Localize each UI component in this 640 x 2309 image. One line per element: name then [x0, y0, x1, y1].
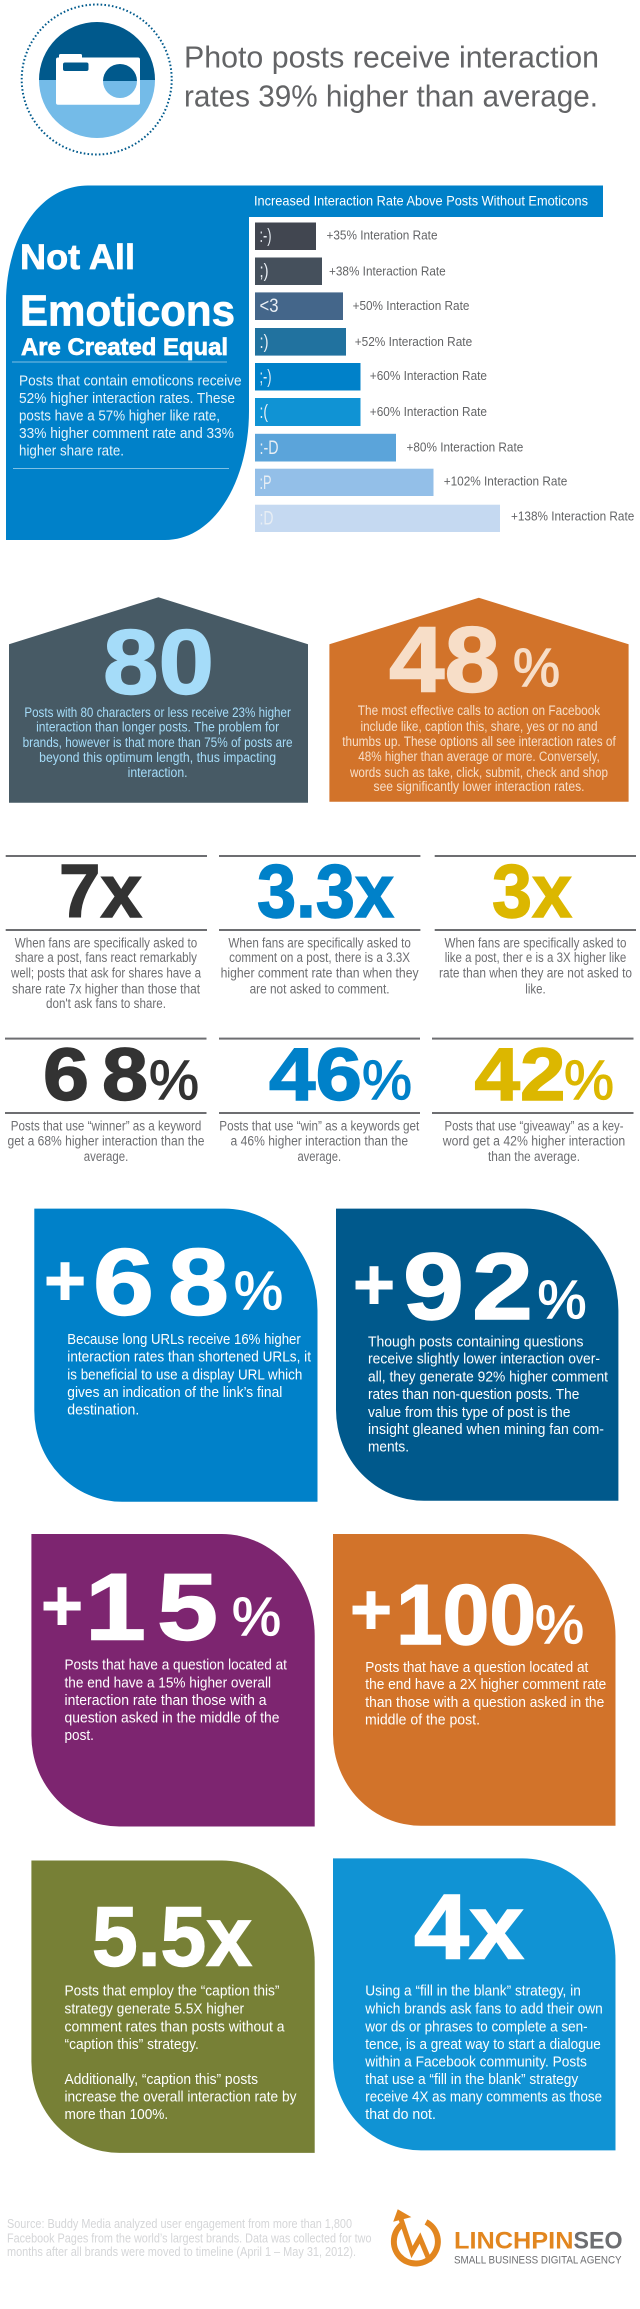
stat: +68%: + [44, 1241, 86, 1321]
title: Photo posts receive interaction [184, 39, 599, 74]
stat: +68% [44, 1229, 283, 1335]
bar chart: interaction rate by emoticon: :-) [260, 226, 272, 247]
stat: 3.3x comments [219, 849, 420, 996]
text: emoticons summary: Posts that contain emoticons receive [19, 372, 242, 390]
stat: 46% win: Posts that use “win” as a keywords get [219, 1118, 420, 1133]
title [184, 39, 599, 114]
bar chart: interaction rate by emoticon: :D [260, 508, 274, 530]
source note: Facebook Pages from the world’s largest brands. Data was collected for two [7, 2232, 372, 2246]
logo: Linchpin SEO: SEO [574, 2227, 622, 2254]
bar chart: interaction rate by emoticon: :-D [260, 438, 278, 459]
text: long URLs detail: gives an indication of the link’s final [67, 1384, 282, 1401]
stat: 68% winner: 8 [102, 1033, 148, 1116]
bar chart: interaction rate by emoticon: ;-) [260, 367, 272, 388]
panel: 48 percent [329, 598, 629, 802]
text: emoticons summary: posts have a 57% higher like rate, [19, 407, 220, 424]
stat: 68% winner: 6 [43, 1033, 89, 1116]
stat: +15% [41, 1554, 281, 1660]
text: questions detail: value from this type of post is the [368, 1404, 570, 1421]
stat: 68% winner: Posts that use “winner” as a keyword [11, 1118, 201, 1133]
stat: 42% giveaway: than the average. [488, 1149, 580, 1164]
stat: 42% giveaway [432, 1033, 634, 1164]
text: question at end detail: Posts that have a question located at [64, 1657, 288, 1674]
stat: 48%: 48 [389, 608, 500, 712]
stat: 3x likes [435, 849, 636, 996]
text: emoticons summary: 52% higher interaction rates. These [19, 390, 235, 407]
stat: +92%: % [538, 1270, 586, 1330]
text: 80 characters detail: interaction. [128, 765, 188, 780]
stat: +15%: 5 [157, 1554, 218, 1660]
text: long URLs detail [67, 1331, 312, 1419]
stat: 48%: % [513, 638, 560, 698]
text: fill in the blank detail: Using a “fill in the blank” strategy, in [365, 1983, 581, 2000]
stat: +15%: 1 [85, 1554, 146, 1660]
stat: +92%: + [353, 1245, 395, 1325]
stat: 7x shares: well; posts that ask for shares have a [10, 965, 201, 980]
tagline: SMALL BUSINESS DIGITAL AGENCY [454, 2254, 622, 2266]
title: rates 39% higher than average. [184, 78, 598, 114]
bar chart: interaction rate by emoticon: +80% Interaction Rate [406, 440, 523, 454]
stat: 7x shares: share a post, fans react remarkably [15, 950, 197, 965]
text: calls to action detail: The most effective calls to action on Facebook [358, 703, 600, 718]
source note: Source: Buddy Media analyzed user engagement from more than 1,800 [7, 2217, 352, 2231]
stat: 46% win: a 46% higher interaction than the [231, 1134, 408, 1148]
text: comment rate detail: middle of the post. [365, 1711, 480, 1728]
stat: +92%: 2 [472, 1234, 533, 1340]
text: questions detail: insight gleaned when mining fan com- [368, 1421, 604, 1438]
stat: 80: 80 [103, 612, 214, 714]
text: questions detail: all, they generate 92% higher comment [368, 1368, 609, 1385]
text: calls to action detail: include like, caption this, share, yes or no and [360, 719, 598, 734]
bar chart: interaction rate by emoticon: +38% Interaction Rate [329, 264, 446, 278]
text: question at end detail: post. [64, 1727, 94, 1744]
bar chart: interaction rate by emoticon: +138% Interaction Rate [511, 510, 634, 524]
stat: 68% winner: % [149, 1048, 199, 1111]
text: comment rate detail: Posts that have a question located at [365, 1659, 589, 1676]
text: fill in the blank detail: tence, is a great way to start a dialogue [365, 2036, 601, 2053]
panel: emoticons intro [6, 186, 603, 540]
stat: 7x shares [6, 849, 207, 1011]
stat: +68%: 6 [93, 1229, 154, 1335]
stat: 7x shares: don't ask fans to share. [46, 996, 166, 1011]
icon: logo ring and arrow [394, 2210, 438, 2264]
stat: +92% [353, 1234, 586, 1340]
stat: 3.3x comments: higher comment rate than when they [221, 965, 419, 980]
text: 80 characters detail: interaction than longer posts. The problem for [36, 720, 280, 735]
card: +15% question at end [31, 1534, 315, 1826]
text: long URLs detail: destination. [67, 1402, 139, 1419]
text: comment rate detail: than those with a question asked in the [365, 1694, 604, 1711]
text: fill in the blank detail: within a Facebook community. Posts [364, 2053, 587, 2070]
source note: months after all brands were moved to timeline (April 1 – May 31, 2012). [7, 2245, 356, 2259]
stat: +68%: 8 [168, 1229, 229, 1335]
stat: 46% win: 46 [269, 1033, 362, 1116]
text: 80 characters detail: beyond this optimum length, thus impacting [39, 750, 276, 765]
bar chart: interaction rate by emoticon: +60% Interaction Rate [370, 405, 487, 419]
text: fill in the blank detail: wor ds or phrases to complete a sen- [364, 2018, 588, 2035]
heading: are created equal: Are Created Equal [21, 334, 228, 361]
stat: 3x likes: like. [525, 981, 546, 996]
bar chart: interaction rate by emoticon: +50% Interaction Rate [353, 299, 469, 313]
stat: +92%: 9 [403, 1234, 464, 1340]
text: calls to action detail: 48% higher than average or more. Conversely, [358, 749, 600, 764]
bar chart: interaction rate by emoticon: :P [260, 473, 272, 494]
icon: camera badge [22, 4, 172, 154]
heading: not all: Not All [20, 238, 135, 277]
text: questions detail: receive slightly lower interaction over- [368, 1351, 600, 1368]
stat: 68% winner: average. [84, 1149, 128, 1164]
card: +92% questions [336, 1209, 618, 1501]
stat: 3.3x comments: 3.3x [257, 849, 394, 933]
text: caption this detail: more than 100%. [64, 2106, 168, 2123]
stat: 5.5x: 5.5x [92, 1890, 252, 1984]
card: +68% long URLs [34, 1209, 318, 1502]
text: question at end detail: question asked in the middle of the [64, 1710, 280, 1726]
bar chart: interaction rate by emoticon: :) [260, 332, 268, 353]
text: 80 characters detail: brands, however is that more than 75% of posts are [23, 735, 293, 750]
text: caption this detail: increase the overall interaction rate by [64, 2088, 297, 2105]
text: fill in the blank detail: receive 4X as many comments as those [365, 2088, 602, 2105]
text: emoticons summary: 33% higher comment rate and 33% [19, 425, 234, 442]
text: calls to action detail: see significantly lower interaction rates. [374, 779, 584, 794]
card: 4x fill in the blank [333, 1858, 616, 2150]
stat: 68% winner [5, 1033, 206, 1164]
logo: Linchpin SEO [394, 2210, 622, 2266]
bar chart: interaction rate by emoticon: +102% Interaction Rate [444, 474, 567, 488]
text: calls to action detail: words such as take, click, submit, check and shop [349, 765, 608, 780]
source note [7, 2217, 372, 2259]
text: 80 characters detail: Posts with 80 characters or less receive 23% higher [24, 705, 291, 720]
text: questions detail: Though posts containing questions [368, 1333, 584, 1350]
stat: 46% win: average. [297, 1149, 341, 1164]
text: fill in the blank detail: which brands ask fans to add their own [364, 2000, 603, 2018]
bar chart: interaction rate by emoticon: +52% Interaction Rate [355, 335, 472, 349]
bar chart: interaction rate by emoticon [255, 222, 634, 532]
text: question at end detail: the end have a 15% higher overall [64, 1674, 271, 1692]
stat: +100% [350, 1568, 584, 1663]
bar chart: interaction rate by emoticon: ;) [260, 261, 268, 282]
text: comment rate detail: the end have a 2X higher comment rate [365, 1676, 606, 1693]
text: caption this detail: Posts that employ the “caption this” [64, 1983, 280, 2000]
bar chart: interaction rate by emoticon: <3 [260, 296, 278, 317]
text: 80 characters detail [23, 705, 293, 780]
card: +100% comment rate [333, 1534, 616, 1826]
stat: 46% win: % [362, 1048, 412, 1111]
panel: 80 characters [9, 597, 308, 803]
text: question at end detail: interaction rate than those with a [64, 1692, 267, 1709]
stat: 68% winner: get a 68% higher interaction than the [8, 1134, 204, 1148]
stat: 3x likes: 3x [492, 849, 572, 933]
text: questions detail: rates than non-question posts. The [368, 1386, 579, 1403]
text: long URLs detail: Because long URLs receive 16% higher [67, 1331, 301, 1348]
text: calls to action detail [342, 703, 616, 794]
stat: +15%: + [41, 1566, 83, 1646]
stat: 42% giveaway: % [564, 1048, 614, 1111]
stat: +100%: % [535, 1595, 584, 1655]
stat: 3.3x comments: are not asked to comment. [250, 981, 390, 996]
bar chart: interaction rate by emoticon: +35% Interation Rate [326, 228, 438, 242]
text: caption this detail: comment rates than posts without a [64, 2018, 285, 2035]
stat: 42% giveaway: 42 [474, 1033, 566, 1116]
chart heading: Increased Interaction Rate Above Posts Without Emoticons [254, 192, 588, 208]
bar chart: interaction rate by emoticon: :( [260, 402, 268, 423]
text: fill in the blank detail: that do not. [365, 2106, 436, 2123]
card: 5.5x caption this [31, 1860, 315, 2153]
stat: 46% win [219, 1033, 420, 1164]
stat: +100%: + [350, 1570, 392, 1650]
stat: 48% [389, 608, 560, 712]
text: caption this detail: Additionally, “caption this” posts [64, 2071, 258, 2088]
text: emoticons summary: higher share rate. [19, 443, 124, 460]
text: comment rate detail [365, 1659, 606, 1728]
stat: 7x shares: share rate 7x higher than those that [12, 981, 200, 996]
stat: +15%: % [232, 1587, 281, 1647]
stat: +68%: % [234, 1261, 283, 1321]
text: question at end detail [64, 1657, 288, 1744]
text: long URLs detail: is beneficial to use a display URL which [67, 1366, 302, 1383]
heading: emoticons: Emoticons [20, 286, 235, 336]
stat: 7x shares: When fans are specifically asked to [15, 936, 197, 951]
stat: 4x: 4x [414, 1876, 524, 1978]
stat: 7x shares: 7x [59, 849, 142, 933]
text: fill in the blank detail: that use a “fill in the blank” strategy [365, 2071, 579, 2088]
text: emoticons summary [19, 372, 242, 460]
text: caption this detail [64, 1983, 297, 2123]
text: questions detail: ments. [368, 1438, 409, 1455]
bar chart: interaction rate by emoticon: +60% Interaction Rate [370, 369, 487, 383]
text: caption this detail: strategy generate 5.5X higher [64, 2000, 244, 2018]
stat: +100%: 100 [396, 1568, 536, 1663]
stat: 42% giveaway: word get a 42% higher interaction [442, 1134, 625, 1148]
text: long URLs detail: interaction rates than shortened URLs, it [67, 1348, 312, 1365]
text: questions detail [368, 1333, 609, 1455]
stat: 3.3x comments: When fans are specifically asked to [228, 936, 411, 951]
text: caption this detail: “caption this” strategy. [64, 2036, 199, 2053]
text: fill in the blank detail [364, 1983, 603, 2123]
stat: 3.3x comments: comment on a post, there is a 3.3X [229, 950, 410, 965]
wordmark: LINCHPIN [454, 2227, 574, 2254]
